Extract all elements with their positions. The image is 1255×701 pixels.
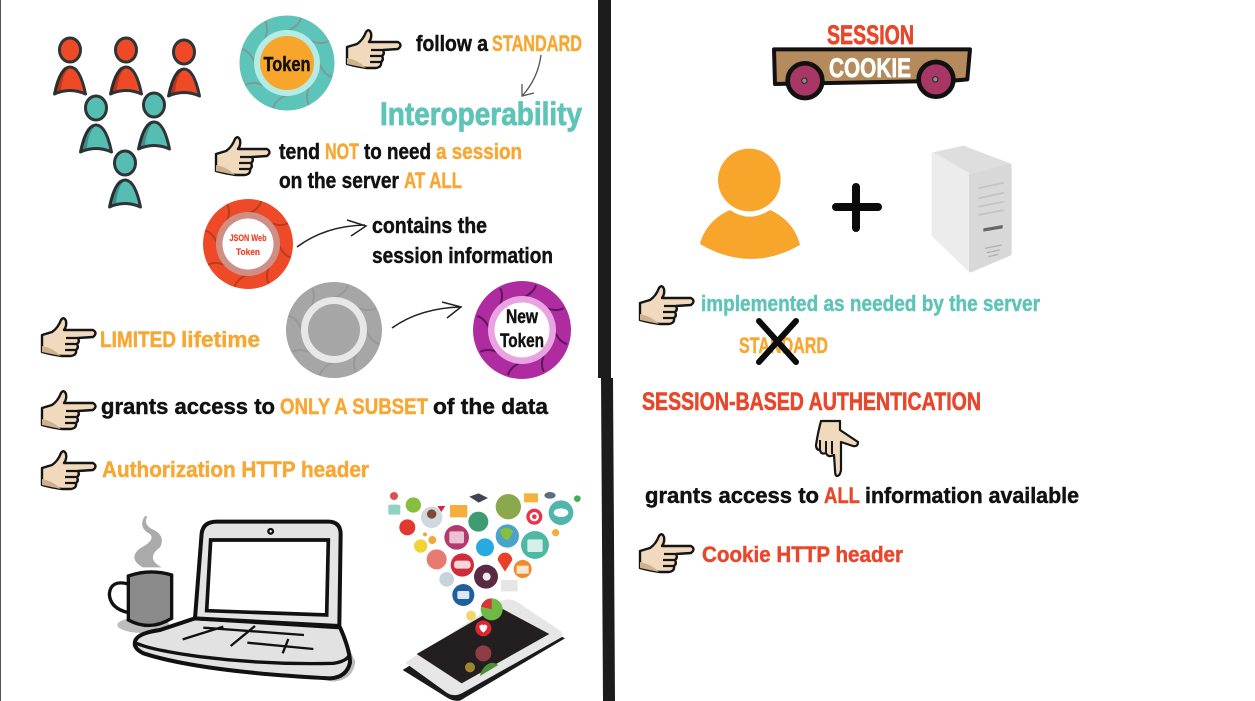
text: follow a standard: follow a bbox=[416, 31, 489, 56]
icon: JSON Web Token: Token bbox=[236, 247, 260, 257]
text: contains session information: contains the bbox=[372, 213, 487, 238]
text: no session needed: NOT bbox=[325, 139, 359, 164]
icon: token: Token bbox=[264, 54, 310, 76]
icon: new token: Token bbox=[500, 331, 544, 352]
icon: pointing hand 5 bbox=[42, 451, 96, 489]
text: implemented as needed: implemented as needed by the server bbox=[701, 291, 1040, 316]
text: interoperability: Interoperability bbox=[380, 96, 582, 132]
arrow: token to session information bbox=[297, 220, 366, 247]
text: session-based authentication: SESSION-BASED AUTHENTICATION bbox=[642, 388, 981, 416]
icon: hand pointing down bbox=[816, 421, 858, 476]
text: no session needed bbox=[279, 139, 522, 193]
panel: session cookie bbox=[640, 20, 1079, 572]
icon: plus bbox=[836, 187, 878, 228]
text: contains session information: session information bbox=[372, 243, 553, 268]
icon: people network bbox=[54, 38, 200, 207]
icon: cross bbox=[759, 321, 796, 362]
central divider bbox=[598, 0, 615, 701]
text: grants access to all: grants access to bbox=[645, 483, 819, 508]
text: no session needed: AT ALL bbox=[404, 168, 462, 193]
icon: cookie wagon bbox=[774, 49, 970, 98]
icon: pointing hand 3 bbox=[42, 318, 96, 356]
icon: pointing hand 7 bbox=[640, 534, 694, 572]
text: no session needed: tend bbox=[279, 139, 320, 164]
icon: JSON Web Token: JSON Web bbox=[230, 233, 267, 243]
text: limited lifetime bbox=[100, 327, 260, 352]
text: grants access to all bbox=[645, 483, 1079, 508]
text: contains session information bbox=[372, 213, 553, 268]
arrow: expired to new token bbox=[392, 302, 461, 328]
panel: token bbox=[42, 16, 582, 701]
illustration: coffee mug and laptop bbox=[109, 516, 355, 682]
icon: pointing hand 4 bbox=[42, 391, 96, 429]
icon: new token bbox=[473, 281, 571, 379]
text: cookie header: Cookie HTTP header bbox=[702, 542, 903, 567]
icon: user bbox=[700, 149, 800, 259]
left edge line bbox=[0, 0, 1, 701]
text: standard crossed out: STANDARD bbox=[739, 333, 828, 358]
text: cookie: COOKIE bbox=[829, 53, 911, 83]
icon: server bbox=[933, 147, 1010, 271]
icon: JSON Web Token bbox=[203, 199, 293, 289]
text: grants subset access bbox=[101, 394, 549, 419]
text: limited lifetime: lifetime bbox=[181, 327, 260, 352]
text: grants access to all: ALL bbox=[824, 483, 860, 508]
text: authorization header: Authorization HTTP header bbox=[102, 457, 369, 482]
text: no session needed: on the server bbox=[279, 168, 399, 193]
text: grants subset access: of the data bbox=[433, 394, 549, 419]
icon: pointing hand 1 bbox=[347, 30, 400, 68]
text: follow a standard: STANDARD bbox=[492, 31, 582, 56]
icon: new token: New bbox=[506, 307, 538, 328]
icon: pointing hand 2 bbox=[216, 137, 270, 175]
icon: token bbox=[240, 16, 334, 110]
text: session: SESSION bbox=[827, 20, 914, 50]
icon: pointing hand 6 bbox=[640, 286, 694, 324]
text: grants subset access: grants access to bbox=[101, 394, 275, 419]
text: follow a standard bbox=[416, 31, 582, 56]
text: limited lifetime: LIMITED bbox=[100, 327, 176, 352]
text: grants access to all: information available bbox=[865, 483, 1079, 508]
text: no session needed: a session bbox=[436, 139, 522, 164]
text: no session needed: to need bbox=[364, 139, 431, 164]
arrow: standard to interoperability bbox=[522, 55, 541, 96]
illustration: phone with app icons bbox=[388, 492, 581, 701]
icon: expired token bbox=[286, 282, 382, 378]
text: grants subset access: ONLY A SUBSET bbox=[280, 394, 428, 419]
